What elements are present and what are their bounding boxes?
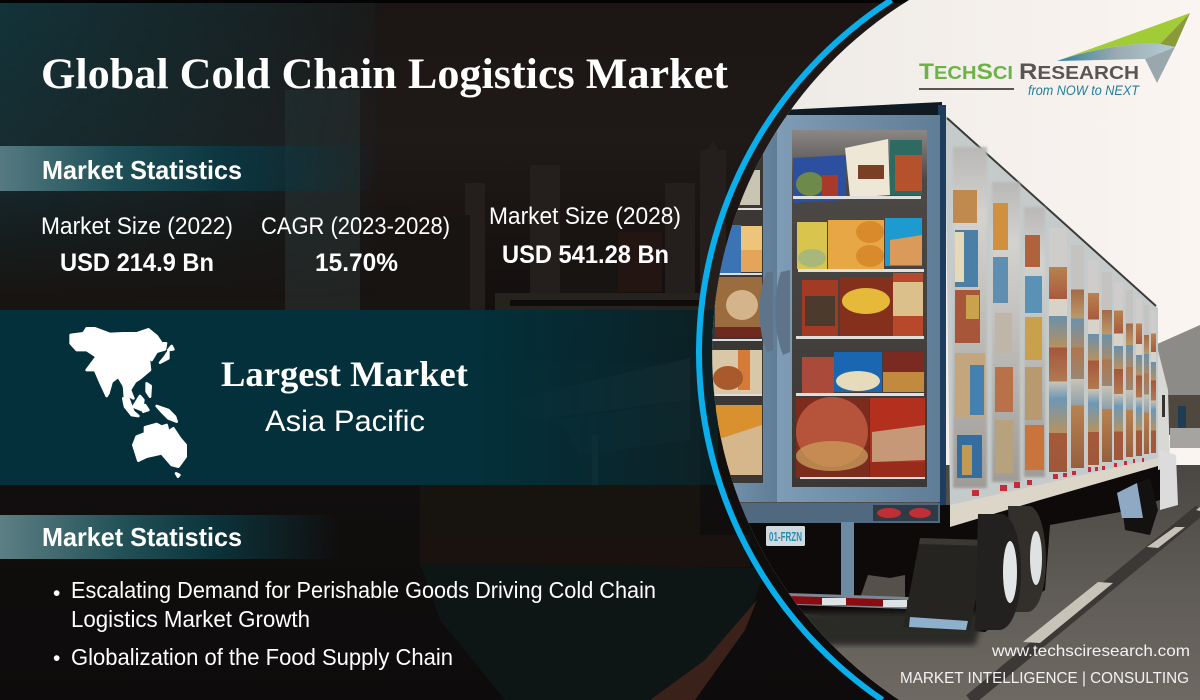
undercarriage shadow	[730, 462, 1160, 632]
tandem wheels	[975, 506, 1046, 630]
text: largest market: Asia Pacific	[265, 405, 425, 438]
panel: largest market band	[0, 310, 718, 485]
rear wheels and cab	[1117, 350, 1186, 535]
left door food shelves	[712, 170, 762, 475]
photo: refrigerated truck on road	[690, 0, 1200, 700]
trailer rear doors	[700, 102, 946, 523]
icon: Asia Pacific map	[71, 328, 186, 477]
stat: market size 2022: Market Size (2022)	[41, 213, 233, 240]
bullet list: drivers: •	[53, 647, 60, 670]
heading: market statistics lower: Market Statistics	[42, 522, 242, 552]
stat: market size 2028	[489, 203, 681, 269]
footer: tagline: MARKET INTELLIGENCE | CONSULTING	[900, 670, 1189, 687]
logo: TechSci Research	[919, 13, 1190, 98]
logo: TechSci Research: from NOW to NEXT	[1028, 83, 1141, 98]
right door food shelves	[793, 139, 925, 479]
footer: website: www.techsciresearch.com	[991, 643, 1190, 660]
support post	[841, 522, 854, 597]
bullet list: drivers: Escalating Demand for Perishable Goods Driving Cold Chain	[71, 577, 656, 603]
rear light bar	[873, 505, 938, 521]
mountain and roadside	[1155, 325, 1200, 448]
stat: CAGR: 15.70%	[315, 249, 398, 277]
panel: market statistics header bar	[0, 146, 375, 191]
mud flap	[906, 538, 978, 630]
bullet list: drivers: •	[53, 582, 60, 605]
license plate	[766, 526, 805, 546]
stat: market size 2022	[41, 213, 233, 277]
bullet list: drivers: Globalization of the Food Supply Chain	[71, 644, 453, 670]
stat: market size 2028: Market Size (2028)	[489, 203, 681, 230]
trailer side wall	[945, 115, 1158, 527]
title: Global Cold Chain Logistics Market	[41, 51, 729, 98]
top teal glow band	[0, 3, 345, 258]
bumper bar	[788, 593, 909, 609]
text: largest market	[221, 354, 468, 438]
license plate: 01-FRZN	[769, 529, 802, 544]
logo: TechSci Research: TECHSCI	[919, 59, 1013, 84]
heading: market statistics: Market Statistics	[42, 155, 242, 185]
road surface	[690, 465, 1200, 700]
panel: drivers header bar	[0, 515, 340, 559]
text: largest market: Largest Market	[221, 354, 468, 394]
cyan circular arc divider	[699, 0, 891, 700]
logo: TechSci Research: RESEARCH	[1019, 59, 1139, 84]
stat: CAGR	[261, 213, 450, 277]
stat: market size 2028: USD 541.28 Bn	[502, 241, 669, 269]
door handles	[760, 270, 790, 355]
bullet list: drivers	[53, 577, 656, 670]
logo mark: arrow	[1057, 13, 1190, 83]
stat: market size 2022: USD 214.9 Bn	[60, 249, 214, 277]
bullet list: drivers: Logistics Market Growth	[71, 606, 310, 632]
stat: CAGR: CAGR (2023-2028)	[261, 213, 450, 240]
